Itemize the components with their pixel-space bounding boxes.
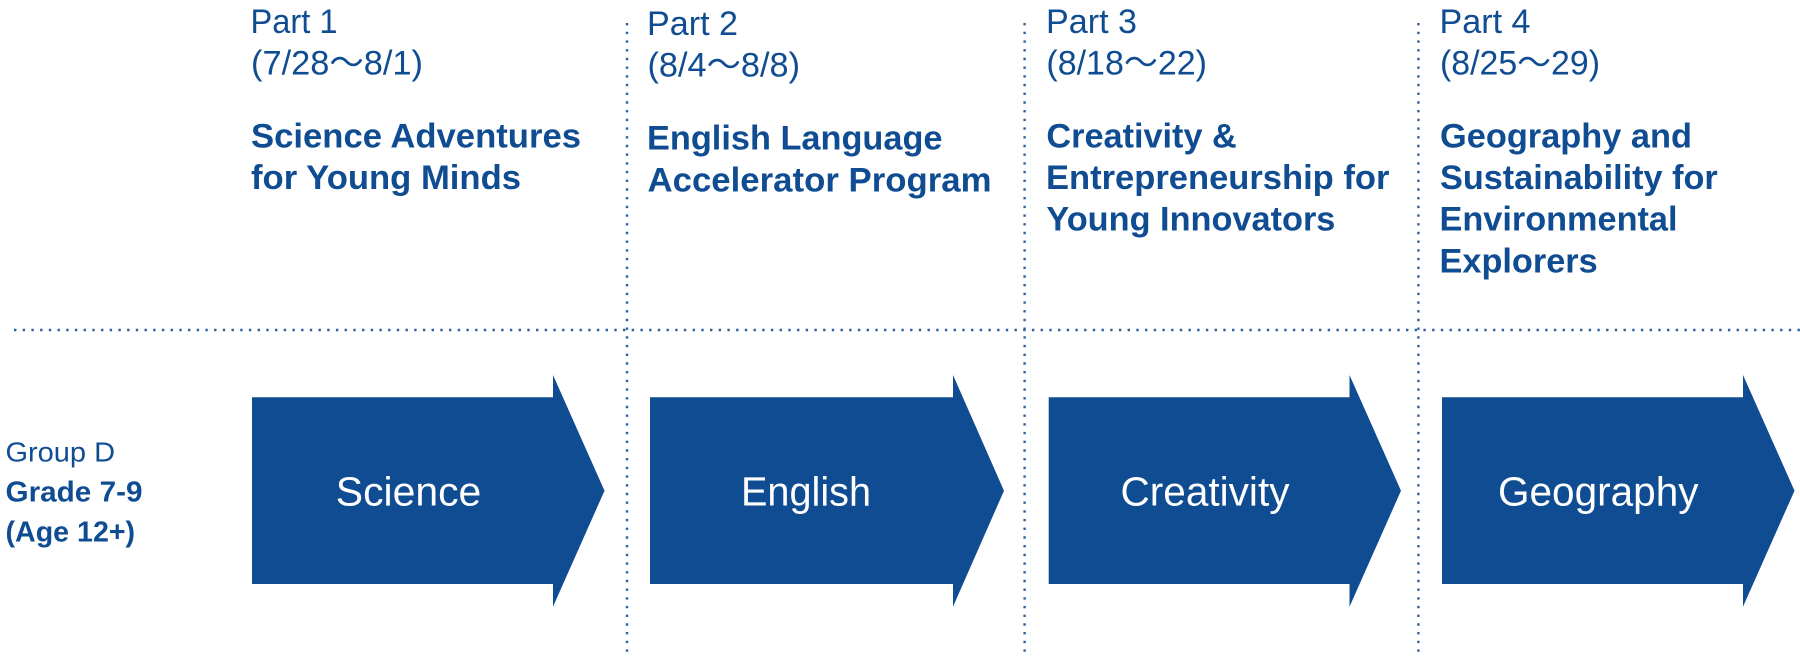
part label and dates — [647, 5, 800, 85]
program title — [251, 117, 581, 197]
arrow: Science: Science — [336, 469, 481, 515]
arrow: Creativity — [1049, 375, 1401, 607]
part label and dates — [1440, 3, 1600, 83]
program title: Sustainability for — [1440, 159, 1718, 197]
program title: Explorers — [1440, 242, 1598, 280]
program title: Accelerator Program — [648, 161, 992, 199]
column heading: Part 4 — [1440, 3, 1718, 280]
arrow: Science — [252, 375, 604, 607]
arrow: Geography — [1442, 375, 1794, 607]
row label: Group D — [6, 436, 142, 548]
row label: Group D: (Age 12+) — [6, 516, 135, 548]
row label: Group D: Group D — [6, 436, 115, 467]
column heading: Part 2 — [647, 5, 992, 199]
row label: Group D: Grade 7-9 — [6, 476, 142, 508]
program title: Young Innovators — [1046, 201, 1335, 239]
arrow: Creativity: Creativity — [1120, 469, 1290, 515]
part label and dates: (7/28〜8/1) — [251, 45, 423, 83]
arrow: English: English — [741, 469, 871, 515]
part label and dates — [1046, 3, 1207, 83]
program title: Science Adventures — [251, 117, 581, 155]
arrow: Geography: Geography — [1498, 469, 1699, 515]
column heading: Part 1 — [250, 3, 581, 197]
program title — [1046, 117, 1389, 239]
part label and dates: Part 3 — [1046, 3, 1137, 41]
part label and dates: (8/18〜22) — [1046, 45, 1207, 83]
column heading: Part 3 — [1046, 3, 1389, 239]
program title — [1440, 117, 1718, 280]
part label and dates: Part 2 — [647, 5, 738, 43]
part label and dates: (8/25〜29) — [1440, 45, 1600, 83]
program title — [647, 120, 992, 199]
part label and dates — [250, 3, 423, 83]
program title: for Young Minds — [251, 159, 521, 197]
program title: Environmental — [1440, 201, 1678, 239]
program title: Entrepreneurship for — [1046, 159, 1389, 197]
program title: Geography and — [1440, 117, 1692, 155]
part label and dates: Part 4 — [1440, 3, 1530, 41]
part label and dates: Part 1 — [250, 3, 338, 41]
arrow: English — [650, 375, 1004, 607]
program title: English Language — [647, 120, 942, 158]
part label and dates: (8/4〜8/8) — [648, 47, 800, 85]
program title: Creativity & — [1046, 117, 1237, 155]
